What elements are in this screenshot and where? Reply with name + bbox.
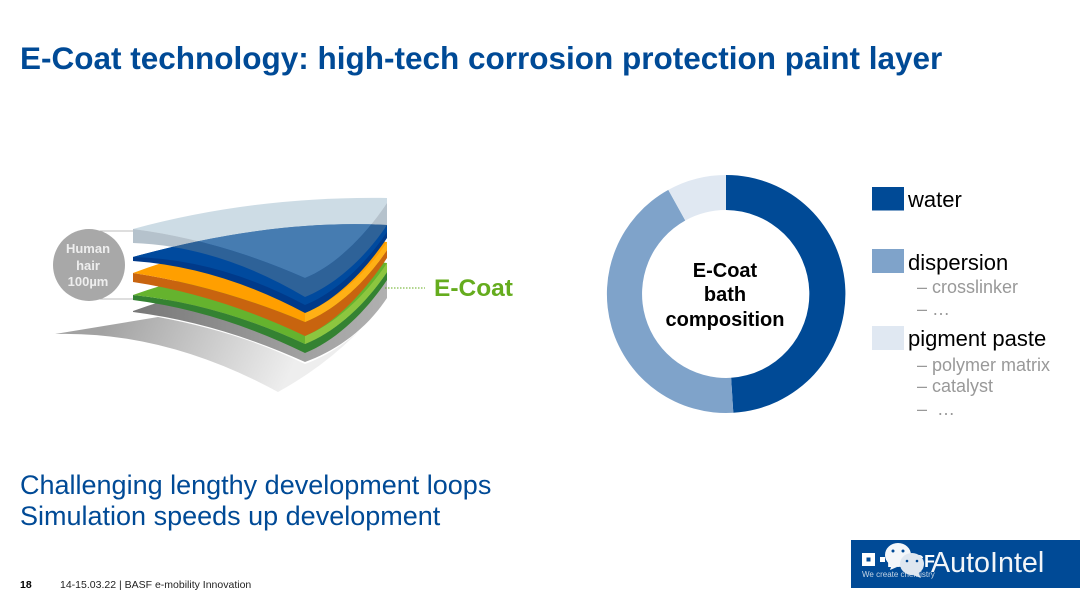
legend: water: water <box>907 187 962 212</box>
donut centre label: bath <box>704 284 746 306</box>
icon: chat bubbles watermark <box>885 543 924 578</box>
legend: pigment paste: pigment paste <box>908 326 1046 351</box>
E-Coat label: E-Coat <box>434 275 513 302</box>
layer stack diagram <box>53 198 513 392</box>
grey substrate layer <box>133 276 387 362</box>
watermark text: AutoIntel <box>931 547 1044 579</box>
title: E-Coat technology: high-tech corrosion protection paint layer <box>20 40 942 76</box>
legend: dispersion: … <box>932 299 950 319</box>
legend: dispersion: – <box>917 299 927 319</box>
legend: pigment paste <box>872 326 1050 419</box>
legend: dispersion: – <box>917 277 927 297</box>
segment: pigment paste <box>668 175 726 220</box>
legend: dispersion <box>872 249 1018 319</box>
human hair circle: hair <box>76 258 100 273</box>
logo block <box>851 540 1080 588</box>
legend: pigment paste: – <box>917 399 927 419</box>
legend: pigment paste: polymer matrix <box>932 355 1050 375</box>
legend <box>872 187 1050 419</box>
E-Coat leader line <box>385 287 425 289</box>
legend: dispersion: dispersion <box>908 250 1008 275</box>
legend: dispersion: crosslinker <box>932 277 1018 297</box>
blue layer <box>133 224 387 313</box>
body text: Simulation speeds up development <box>20 501 441 531</box>
orange layer <box>133 238 387 336</box>
donut centre label: composition <box>666 309 784 331</box>
footer: 18 <box>20 579 32 591</box>
donut centre label: E-Coat <box>693 260 758 282</box>
human hair circle <box>53 229 125 301</box>
green layer <box>133 260 387 353</box>
BASF logo: BASF <box>887 551 935 571</box>
footer: 14-15.03.22 | BASF e-mobility Innovation <box>60 579 251 591</box>
BASF logo: We create chemistry <box>862 570 935 579</box>
legend: pigment paste: – <box>917 376 927 396</box>
legend: water <box>872 187 962 212</box>
legend: pigment paste: – <box>917 355 927 375</box>
substrate shadow <box>55 298 387 392</box>
donut chart <box>607 175 845 413</box>
human hair circle: 100µm <box>68 274 108 289</box>
segment: dispersion <box>607 190 733 413</box>
hair bracket lines <box>100 231 133 299</box>
legend: pigment paste: catalyst <box>932 376 993 396</box>
translucent clear coat layer <box>133 198 387 297</box>
human hair circle: Human <box>66 241 110 256</box>
body text: Challenging lengthy development loops <box>20 470 491 500</box>
legend: pigment paste: … <box>937 399 955 419</box>
BASF logo <box>862 551 935 579</box>
segment: water <box>726 175 845 413</box>
